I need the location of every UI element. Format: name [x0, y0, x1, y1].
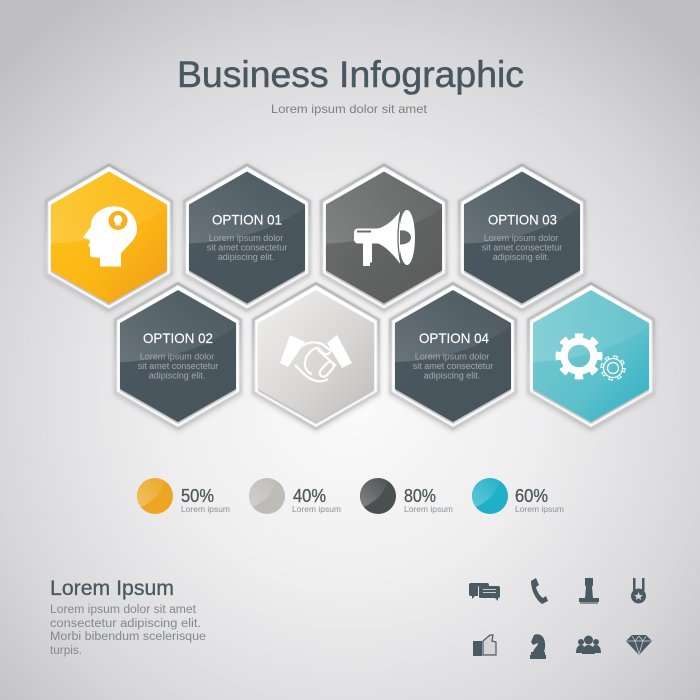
panel: option 04 hexagon: [389, 282, 517, 432]
legend: 80%: 80%: [404, 486, 436, 506]
option 04 text: adipiscing elit.: [424, 370, 480, 380]
footer paragraph: turpis.: [50, 645, 82, 657]
legend: 50%: Lorem ipsum: [181, 504, 230, 514]
icon: handshake: [280, 335, 352, 381]
footer paragraph: consectetur adipiscing elit.: [50, 618, 201, 630]
panel: gears hexagon: [527, 282, 655, 432]
subtitle: Lorem ipsum dolor sit amet: [271, 102, 428, 116]
option 02 text: Lorem ipsum dolor: [140, 352, 214, 362]
option 02 text: sit amet consectetur: [138, 361, 218, 371]
footer heading: Lorem Ipsum: [50, 577, 174, 600]
icon: diamond: [626, 635, 652, 655]
icon: group of people: [576, 636, 601, 654]
option 01 heading: OPTION 01: [212, 212, 282, 228]
option 03 text: sit amet consectetur: [482, 242, 562, 252]
option 01 text: sit amet consectetur: [207, 242, 287, 252]
panel: option 02 hexagon: [114, 282, 242, 432]
footer paragraph: Morbi bibendum scelerisque: [50, 631, 206, 643]
legend: 50%: 50%: [181, 486, 214, 506]
legend: 60%: Lorem ipsum: [515, 504, 564, 514]
legend: 80%: [360, 478, 453, 514]
icon: megaphone: [354, 210, 415, 266]
icon: medal: [631, 578, 646, 604]
legend: 80%: Lorem ipsum: [404, 504, 453, 514]
title: Business Infographic: [177, 54, 524, 95]
option 01 text: Lorem ipsum dolor: [209, 233, 283, 243]
option 04 text: sit amet consectetur: [413, 361, 493, 371]
icon: chat bubbles: [469, 583, 500, 601]
legend: 40%: [249, 478, 341, 514]
option 04 text: Lorem ipsum dolor: [415, 352, 489, 362]
option 02 heading: OPTION 02: [143, 330, 213, 346]
legend: 60%: 60%: [515, 486, 548, 506]
option 03 text: Lorem ipsum dolor: [484, 233, 558, 243]
panel: megaphone hexagon: [320, 164, 448, 314]
icon: gears: [559, 336, 624, 379]
icon: telephone: [531, 578, 548, 604]
legend: 60%: [472, 478, 564, 514]
panel: head icon hexagon: [45, 164, 173, 314]
option 03 text: adipiscing elit.: [493, 252, 549, 262]
option 04 heading: OPTION 04: [419, 330, 489, 346]
option 03 heading: OPTION 03: [488, 212, 557, 228]
icon: chess knight: [530, 634, 546, 659]
icon: head with light bulb: [83, 206, 137, 266]
footer paragraph: Lorem ipsum dolor sit amet: [50, 604, 197, 616]
legend: 40%: 40%: [293, 486, 326, 506]
option 02 text: adipiscing elit.: [149, 370, 205, 380]
icon: stamp: [579, 578, 599, 604]
icon: thumbs up: [473, 635, 496, 656]
panel: handshake hexagon: [252, 282, 380, 432]
option 01 text: adipiscing elit.: [218, 252, 274, 262]
panel: option 01 hexagon: [183, 164, 311, 314]
panel: option 03 hexagon: [458, 164, 586, 314]
legend: 40%: Lorem ipsum: [292, 504, 341, 514]
legend: 50%: [137, 478, 230, 514]
